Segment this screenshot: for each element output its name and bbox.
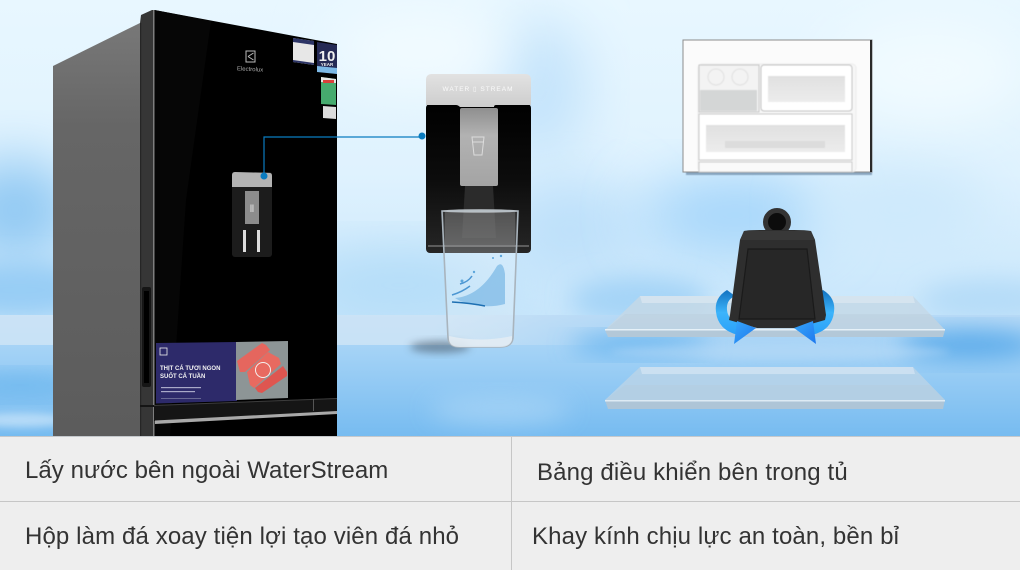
feature: control panel: Bảng điều khiển bên trong tủ [537, 459, 848, 486]
fridge door edge [140, 10, 155, 436]
small water dispenser on door [232, 172, 272, 257]
feature: external water: Lấy nước bên ngoài WaterStream [25, 457, 388, 484]
upper drawer [761, 65, 852, 111]
feature table [0, 436, 1020, 570]
upper glass shelf [605, 296, 945, 337]
background: pale sky and clouds [0, 0, 1020, 437]
right arrow head [794, 321, 816, 344]
door divider and silver handle [154, 398, 337, 424]
promo label [156, 341, 288, 404]
lower glass shelf [605, 367, 945, 409]
ice tray loop handle [766, 210, 788, 234]
lower drawer [699, 114, 852, 160]
silver dispenser paddle [460, 108, 498, 186]
fridge door front [154, 10, 337, 436]
product illustration scene [0, 0, 1020, 436]
feature: ice tray: Hộp làm đá xoay tiện lợi tạo viên đá nhỏ [25, 523, 459, 550]
WATER STREAM logo: WATER ▯ STREAM [442, 86, 514, 93]
rotating ice tray [716, 210, 834, 344]
water splash [455, 264, 505, 306]
glass shelves [605, 296, 945, 409]
left rotation arrow band [716, 290, 738, 335]
fridge side panel [53, 23, 140, 436]
Electrolux logo [237, 51, 263, 74]
left arrow head [734, 321, 756, 344]
inner control panel photo [683, 40, 872, 175]
energy and warranty stickers: 10 [319, 48, 335, 65]
ice tray body [729, 230, 826, 328]
energy and warranty stickers [293, 38, 337, 119]
enlarged water dispenser [426, 74, 531, 253]
promo label: SUỐT CẢ TUẦN [160, 373, 205, 380]
ice tray compartment [699, 65, 759, 112]
right rotation arrow band [812, 290, 834, 335]
feature: glass shelves: Khay kính chịu lực an toàn, bền bỉ [532, 523, 899, 550]
small water dispenser on door: Ⅱ [250, 204, 254, 215]
connector line with dots [260, 132, 426, 180]
energy and warranty stickers: YEAR [321, 62, 334, 67]
promo label: THỊT CÁ TƯƠI NGON [160, 365, 220, 372]
refrigerator [53, 10, 337, 436]
Electrolux logo: Electrolux [237, 66, 263, 74]
glass of water [410, 209, 518, 353]
